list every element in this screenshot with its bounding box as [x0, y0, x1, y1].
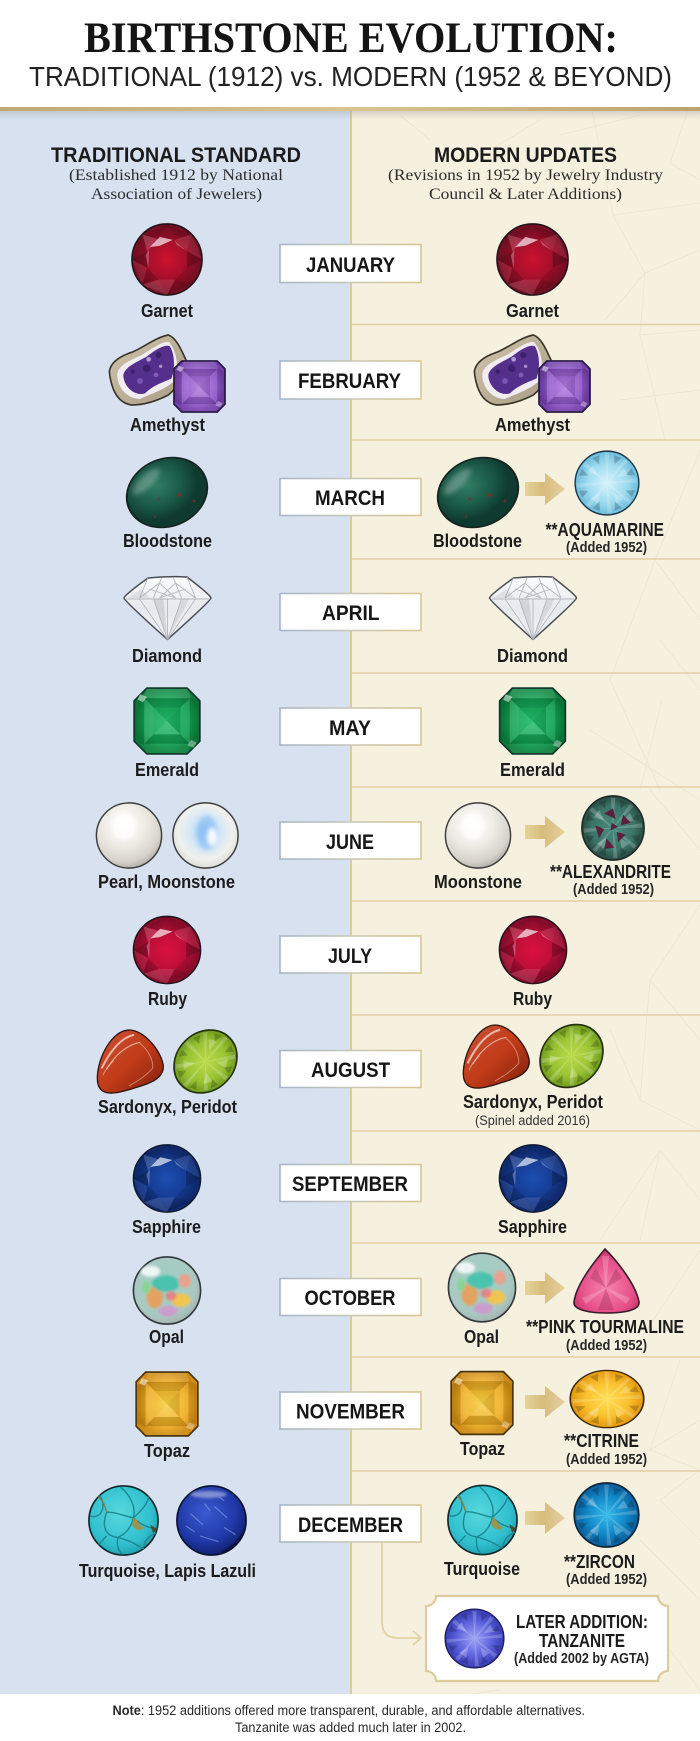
gem: emerald modern [500, 688, 565, 754]
month label: November [280, 1392, 421, 1429]
label: emerald modern: Emerald [500, 760, 565, 780]
note: alexandrite added: (Added 1952) [573, 882, 654, 898]
month label: September: SEPTEMBER [292, 1172, 408, 1196]
arrow: bloodstone to aquamarine [525, 473, 565, 505]
label: garnet traditional: Garnet [141, 301, 193, 321]
gem: bloodstone traditional [116, 446, 218, 539]
arrow: topaz to citrine [525, 1386, 565, 1418]
arrow: moonstone to alexandrite [525, 816, 565, 848]
row: July [133, 916, 567, 1009]
gem: alexandrite [582, 796, 644, 860]
label: diamond traditional: Diamond [132, 646, 202, 666]
label: amethyst modern: Amethyst [495, 415, 570, 435]
gem: aquamarine [575, 451, 639, 515]
row: May [134, 688, 565, 780]
gem: amethyst traditional [109, 335, 225, 412]
heading: traditional column: (Established 1912 by National [69, 167, 284, 184]
label: sardonyx and peridot traditional: Sardonyx, Peridot [98, 1097, 237, 1117]
panel: footer note [0, 1694, 700, 1741]
note line 2: Tanzanite was added much later in 2002. [235, 1720, 466, 1735]
month label: February: FEBRUARY [298, 369, 401, 393]
gem: garnet modern [497, 224, 568, 295]
row: November [136, 1370, 647, 1468]
month label: March [280, 478, 421, 516]
gem: tanzanite [445, 1609, 504, 1668]
gem: sapphire traditional [133, 1145, 201, 1212]
gem: turquoise traditional [89, 1486, 158, 1555]
month label: December: DECEMBER [298, 1513, 403, 1537]
row: August [97, 1012, 616, 1128]
heading: modern column: MODERN UPDATES [434, 144, 617, 167]
row: March [116, 446, 664, 556]
gem: topaz modern [451, 1372, 513, 1434]
label: sardonyx and peridot modern: Sardonyx, Peridot [463, 1092, 603, 1112]
callout date: (Added 2002 by AGTA) [514, 1651, 649, 1667]
label: sapphire traditional: Sapphire [132, 1217, 201, 1237]
panel: header [0, 0, 700, 108]
panel: traditional column background [0, 111, 350, 1694]
row: September [132, 1145, 567, 1237]
note: citrine added: (Added 1952) [566, 1452, 647, 1468]
gem: zircon [574, 1483, 639, 1547]
label: ruby traditional: Ruby [148, 989, 187, 1009]
header gold rule [0, 107, 700, 120]
label: aquamarine: **AQUAMARINE [546, 520, 664, 540]
gem: garnet traditional [132, 224, 202, 295]
arrow: opal to pink tourmaline [525, 1272, 565, 1304]
callout heading: LATER ADDITION: [516, 1612, 648, 1632]
month label: January [280, 244, 421, 282]
note: pink tourmaline added: (Added 1952) [566, 1338, 647, 1354]
heading: traditional column [51, 144, 301, 203]
label: opal traditional: Opal [149, 1327, 184, 1347]
label: pearl and moonstone: Pearl, Moonstone [98, 872, 235, 892]
label: citrine: **CITRINE [564, 1431, 639, 1451]
gem: opal traditional [133, 1257, 201, 1324]
title: BIRTHSTONE EVOLUTION: [84, 15, 618, 62]
month label: October: OCTOBER [304, 1286, 396, 1310]
row: June [96, 796, 671, 898]
gem: ruby modern [499, 916, 567, 984]
heading: traditional column: Association of Jewelers) [91, 186, 262, 203]
month label: December [280, 1505, 421, 1542]
month label: April: APRIL [322, 601, 380, 625]
gem: emerald traditional [134, 688, 200, 754]
month label: August [280, 1050, 421, 1088]
month label: January: JANUARY [306, 253, 395, 277]
month label: September [280, 1164, 421, 1202]
month label: May: MAY [329, 716, 371, 740]
subtitle: TRADITIONAL (1912) vs. MODERN (1952 & BEYOND) [29, 61, 672, 92]
note: aquamarine added: (Added 1952) [566, 540, 647, 556]
label: emerald traditional: Emerald [135, 760, 199, 780]
gem: peridot traditional [161, 1017, 250, 1106]
heading: traditional column: TRADITIONAL STANDARD [51, 144, 301, 167]
label: garnet modern: Garnet [506, 301, 559, 321]
month label: July [280, 936, 421, 973]
label: turquoise modern: Turquoise [444, 1559, 520, 1579]
row: October [133, 1249, 684, 1354]
callout gem name: TANZANITE [539, 1631, 625, 1651]
month label: July: JULY [328, 944, 372, 968]
note: spinel added: (Spinel added 2016) [475, 1112, 590, 1128]
note line 1: Note: 1952 additions offered more transparent, durable, and affordable alternatives. [112, 1703, 585, 1718]
label: ruby modern: Ruby [513, 989, 552, 1009]
label: bloodstone traditional: Bloodstone [123, 531, 212, 551]
row: April [124, 577, 576, 666]
gem: ruby traditional [133, 916, 201, 984]
gem: pink tourmaline [574, 1249, 639, 1313]
month label: March: MARCH [315, 486, 385, 510]
row: February [109, 335, 590, 435]
month label: October [280, 1278, 421, 1316]
arrow: turquoise to zircon [525, 1502, 565, 1534]
month label: April [280, 594, 421, 630]
gem: moonstone traditional [173, 803, 238, 868]
month label: November: NOVEMBER [296, 1400, 405, 1424]
gem: citrine [570, 1370, 644, 1428]
row: December [79, 1483, 647, 1645]
callout: later addition tanzanite [426, 1596, 668, 1681]
connector: December to later addition [382, 1542, 421, 1645]
gem: bloodstone modern [427, 446, 529, 539]
row: January [132, 224, 568, 321]
gem: diamond traditional [124, 577, 211, 640]
heading: modern column: (Revisions in 1952 by Jewelry Industry [388, 167, 663, 184]
note: zircon added: (Added 1952) [566, 1572, 647, 1588]
heading: modern column: Council & Later Additions) [429, 186, 622, 203]
label: topaz modern: Topaz [460, 1439, 505, 1459]
gem: pearl traditional [96, 803, 162, 868]
gem: amethyst modern [474, 335, 590, 412]
gem: opal modern [448, 1253, 516, 1322]
gem: sapphire modern [499, 1145, 567, 1212]
label: topaz traditional: Topaz [144, 1441, 190, 1461]
label: bloodstone modern: Bloodstone [433, 531, 522, 551]
month label: February [280, 361, 421, 399]
gem: sardonyx traditional [97, 1030, 163, 1093]
gem: moonstone modern [445, 803, 511, 868]
gem: sardonyx modern [463, 1025, 529, 1088]
label: turquoise and lapis lazuli: Turquoise, Lapis Lazuli [79, 1561, 256, 1581]
month label: June: JUNE [326, 830, 374, 854]
panel: modern column background [350, 110, 700, 1700]
month label: June [280, 822, 421, 859]
label: diamond modern: Diamond [497, 646, 568, 666]
gem: turquoise modern [448, 1485, 517, 1555]
gem: lapis lazuli traditional [177, 1486, 246, 1555]
gem: topaz traditional [136, 1372, 198, 1436]
label: moonstone modern: Moonstone [434, 872, 522, 892]
gem: diamond modern [490, 577, 576, 640]
label: zircon: **ZIRCON [564, 1552, 635, 1572]
heading: modern column [388, 144, 663, 203]
label: alexandrite: **ALEXANDRITE [550, 862, 671, 882]
label: sapphire modern: Sapphire [498, 1217, 567, 1237]
label: opal modern: Opal [464, 1327, 499, 1347]
month label: August: AUGUST [311, 1058, 390, 1082]
gem: peridot modern [527, 1012, 616, 1100]
month label: May [280, 708, 421, 745]
label: amethyst traditional: Amethyst [130, 415, 205, 435]
